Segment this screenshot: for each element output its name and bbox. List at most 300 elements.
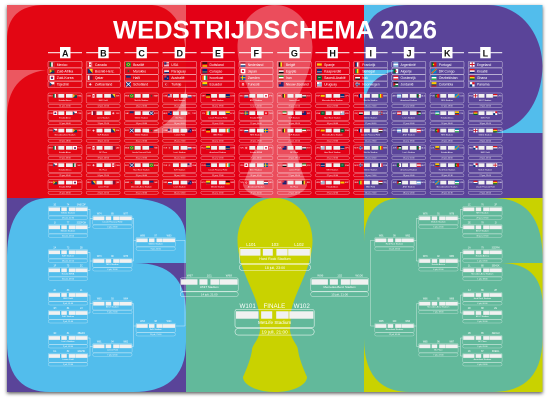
third place match: L102: [294, 242, 304, 247]
matches A: Estadio Akron: [59, 116, 71, 119]
matches I: Gillette Stadium: [364, 168, 378, 171]
right bracket: quarter-finals: 11 juli, 23:00: [389, 248, 401, 250]
panel: top left background shape: [7, 5, 186, 133]
third place match: Hard Rock Stadium: [259, 257, 291, 261]
left bracket: round of 32: 2A: [53, 246, 57, 249]
matches J: JOR: [393, 148, 397, 150]
matches L: 18 juni, 01:00: [480, 123, 491, 125]
matches J: ALG: [421, 146, 426, 150]
right bracket: round of 32: Estadio Azteca: [476, 254, 490, 257]
left bracket: round of 32: Lumen Field: [62, 359, 74, 361]
matches I: 26 juni, 21:00: [365, 192, 376, 194]
right bracket: round of 32: 1C: [468, 204, 471, 206]
right bracket: round of 16: [419, 213, 458, 356]
left bracket: round of 32: 3BEFIJ: [78, 333, 85, 335]
matches E: CIV: [231, 165, 235, 167]
matches G: Lumen Field: [289, 169, 299, 171]
left bracket: round of 32: 77: [67, 222, 70, 224]
right bracket: round of 16: W88: [449, 299, 455, 301]
matches B: SoFi Stadium: [98, 134, 109, 137]
right bracket: round of 32: 1A: [468, 246, 471, 249]
team list I: Noorwegen: [362, 83, 380, 87]
left bracket: round of 16: W77: [123, 213, 129, 215]
matches E: NRG Stadium: [212, 99, 224, 102]
matches I: FRA: [354, 94, 359, 98]
matches G: NZL: [278, 148, 282, 150]
heading B: B: [100, 48, 107, 58]
matches G: 15 juni, 21:00: [289, 106, 300, 108]
team list A: Zuid-Korea: [57, 76, 74, 80]
matches E: Lincoln Financial Field: [208, 117, 227, 119]
left bracket: quarter-finals: W94: [167, 321, 172, 323]
matches I: 16 juni, 21:00: [365, 106, 376, 108]
team list K: Colombia: [439, 83, 453, 87]
matches A: MEX: [77, 165, 82, 167]
matches E: 15 juni, 01:00: [212, 123, 223, 125]
team list B: Qatar: [95, 76, 104, 80]
left bracket: round of 32: 29 juni, 22:30: [62, 217, 75, 219]
matches H: 16 juni, 00:00: [327, 123, 338, 125]
left bracket: round of 32: 1E: [53, 204, 57, 206]
matches F: Estadio BBVA: [250, 116, 263, 119]
matches K: UZB: [460, 182, 464, 184]
matches G: 27 juni, 05:00: [289, 175, 300, 177]
matches E: [201, 93, 235, 194]
matches L: CRO: [498, 96, 502, 98]
left bracket: round of 32: Estadio BBVA: [62, 272, 75, 275]
team list E: Ecuador: [210, 83, 223, 87]
matches E: 25 juni, 22:00: [212, 175, 223, 177]
right semi-final: 102: [337, 273, 342, 277]
matches K: POR: [459, 165, 464, 167]
group J: [392, 47, 426, 194]
icon: trophy: [238, 198, 312, 392]
left bracket: round of 32: MetLife Stadium: [61, 229, 76, 232]
right bracket: round of 16: 96: [437, 341, 440, 343]
matches J: ALG: [393, 164, 397, 167]
team list G: Nieuw-Zeeland: [286, 83, 309, 87]
matches D: PAR: [192, 146, 197, 150]
matches K: 24 juni, 04:00: [441, 158, 453, 160]
matches A: CZE: [49, 130, 53, 132]
matches E: 21 juni, 02:00: [212, 158, 223, 160]
left bracket: round of 32: 3ABCDF: [77, 203, 86, 206]
matches I: MetLife Stadium: [364, 151, 378, 154]
team list H: Kaapverdië: [324, 69, 341, 73]
right semi-final: Mercedes-Benz Stadium: [324, 285, 356, 289]
left bracket: round of 16: 4 juli, 23:00: [107, 226, 118, 228]
team list C: Marokko: [133, 69, 146, 73]
left bracket: round of 16: W75: [123, 256, 129, 258]
matches H: ESP: [316, 130, 321, 132]
group F: [239, 47, 273, 194]
heading I: I: [370, 48, 372, 58]
matches F: NED: [240, 130, 244, 132]
panel: top right background shape: [364, 5, 542, 198]
matches J: AUT: [393, 112, 397, 115]
heading H: H: [329, 48, 336, 58]
matches F: 21 juni, 06:00: [250, 158, 262, 160]
matches K: COL: [460, 113, 463, 115]
matches G: SoFi Stadium: [289, 116, 300, 119]
third place match: 103: [271, 242, 279, 247]
matches K: [430, 93, 464, 194]
heading C: [124, 47, 158, 58]
right bracket: round of 32: AT&T Stadium: [476, 229, 489, 232]
left bracket: round of 32: 75: [67, 265, 70, 267]
third place match: [239, 242, 311, 270]
matches H: CPV: [345, 96, 350, 98]
team list I: [354, 61, 388, 88]
matches D: TUR: [163, 148, 168, 150]
matches E: BMO Field: [213, 135, 222, 137]
matches D: [163, 93, 197, 194]
matches D: 26 juni, 04:00: [174, 192, 185, 194]
matches G: EGY: [307, 148, 311, 150]
left bracket: round of 16: 89: [111, 213, 114, 215]
right bracket: quarter-finals: W95: [379, 321, 384, 323]
team list E: Curaçao: [210, 69, 222, 73]
matches B: BIH: [87, 182, 91, 184]
matches B: SUI: [87, 130, 91, 132]
matches A: KOR: [77, 182, 82, 184]
right bracket: round of 32: 87: [481, 351, 484, 353]
matches B: SUI: [87, 165, 91, 167]
matches C: Hard Rock Stadium: [133, 168, 150, 171]
matches D: TUR: [163, 165, 168, 167]
team list C: Brazilië: [133, 63, 144, 67]
matches K: Hard Rock Stadium: [439, 168, 456, 171]
matches F: JPN: [240, 165, 244, 167]
matches L: 27 juni, 23:00: [480, 192, 491, 194]
matches H: ESP: [316, 96, 321, 98]
matches L: BMO Field: [481, 117, 490, 119]
right bracket: round of 32: 3 juli, 05:00: [477, 346, 488, 348]
matches G: 21 juni, 21:00: [289, 140, 300, 142]
team list K: [430, 61, 464, 88]
decorative pale trophy: [238, 5, 312, 199]
left bracket: round of 32: 81: [67, 333, 70, 335]
matches D: PAR: [163, 181, 168, 184]
matches A: KOR: [49, 113, 53, 115]
matches A: CZE: [78, 113, 82, 115]
heading G: [277, 47, 311, 58]
matches I: NOR: [354, 148, 359, 150]
left semi-final: 14 juli, 21:00: [201, 292, 218, 296]
left bracket: round of 32: 1G: [53, 351, 57, 353]
matches J: AT&T Stadium: [403, 134, 415, 137]
matches G: BEL: [278, 96, 282, 98]
matches F: 26 juni, 01:00: [250, 192, 262, 194]
matches B: 12 juni, 21:00: [98, 106, 109, 108]
final match: FINALE: [264, 303, 285, 310]
matches G: IRN: [307, 165, 311, 167]
group I: [354, 47, 388, 194]
group H: [315, 47, 350, 194]
matches L: 24 juni, 01:00: [480, 158, 491, 160]
matches F: SWE: [268, 165, 273, 167]
matches B: QAT: [116, 181, 120, 184]
team list K: DR Congo: [439, 69, 455, 73]
matches C: [124, 93, 159, 194]
matches K: 23 juni, 19:00: [441, 140, 453, 142]
panel: right bracket background: [364, 198, 542, 392]
right bracket: round of 32: 4 juli, 00:00: [477, 303, 488, 305]
heading J: [392, 47, 426, 58]
matches D: USA: [163, 129, 168, 132]
right bracket: quarter-finals: 100: [392, 321, 397, 323]
right bracket: round of 32: 3EHIJK: [492, 265, 500, 267]
matches H: CPV: [316, 165, 321, 167]
right bracket: round of 16: 7 juli, 22:00: [433, 354, 444, 356]
matches J: 17 juni, 06:00: [403, 123, 414, 125]
matches K: UZB: [460, 130, 464, 132]
left bracket: round of 16: W74: [97, 213, 102, 215]
matches F: AT&T Stadium: [250, 168, 262, 171]
matches F: [239, 93, 273, 194]
left bracket: quarter-finals: W90: [167, 235, 172, 237]
matches J: ARG: [392, 94, 397, 98]
matches K: COL: [431, 148, 435, 150]
matches F: NED: [268, 182, 273, 184]
matches J: 23 juni, 05:00: [403, 158, 414, 160]
matches C: BRA: [154, 164, 159, 167]
group G: [277, 47, 311, 194]
matches C: HAI: [126, 112, 129, 115]
right bracket: round of 16: 91: [437, 213, 440, 215]
matches G: IRN: [278, 113, 282, 115]
left bracket: round of 32: 2K: [53, 290, 57, 292]
right bracket: round of 32: 76: [481, 204, 484, 206]
matches D: 20 juni, 06:00: [174, 158, 185, 160]
heading D: D: [177, 48, 184, 58]
matches G: SoFi Stadium: [289, 134, 300, 137]
left bracket: round of 32: 73: [67, 247, 70, 249]
team list G: België: [286, 63, 295, 67]
matches I: NOR: [354, 165, 359, 167]
team list G: Iran: [286, 76, 292, 80]
matches D: 19 juni, 21:00: [174, 140, 185, 142]
matches H: Estadio Akron: [327, 186, 338, 189]
matches B: CAN: [87, 146, 92, 150]
matches I: 23 juni, 02:00: [365, 158, 376, 160]
team list K: Oezbekistan: [439, 76, 458, 80]
matches D: Levi's Stadium: [173, 186, 186, 189]
heading J: J: [406, 48, 412, 58]
left semi-final: [180, 273, 238, 297]
matches J: [392, 93, 426, 194]
matches B: Lumen Field: [98, 187, 108, 189]
right bracket: round of 16: W85: [423, 341, 428, 343]
matches H: Mercedes-Benz Stadium: [322, 134, 343, 137]
matches A: RSA: [78, 94, 82, 98]
matches L: 23 juni, 22:00: [480, 140, 491, 142]
matches C: MAR: [154, 94, 159, 98]
matches K: 28 juni, 01:30: [441, 175, 453, 177]
matches D: AUS: [163, 112, 168, 115]
matches I: 22 juni, 23:00: [365, 140, 376, 142]
third place match: 18 juli, 23:00: [265, 266, 285, 270]
group D: [163, 47, 197, 194]
final match: W101: [240, 303, 256, 310]
matches C: Mercedes-Benz Stadium: [131, 186, 152, 189]
matches F: NRG Stadium: [250, 134, 262, 137]
matches J: ARG: [392, 129, 397, 132]
matches K: COD: [459, 148, 464, 150]
right bracket: round of 32: 3EFGIJ: [492, 333, 500, 335]
matches D: SoFi Stadium: [174, 168, 186, 171]
team list H: Uruguay: [324, 83, 337, 87]
matches K: 28 juni, 01:30: [441, 192, 453, 194]
matches L: MetLife Stadium: [478, 168, 492, 171]
matches F: 20 juni, 19:00: [250, 140, 262, 142]
matches L: PAN: [498, 112, 502, 115]
matches E: ECU: [202, 148, 206, 150]
right bracket: round of 32: 2I: [495, 222, 497, 224]
right bracket: round of 16: W87: [449, 341, 455, 343]
matches K: POR: [431, 130, 435, 132]
matches C: 14 juni, 03:00: [136, 123, 147, 125]
matches J: JOR: [393, 182, 397, 184]
right bracket: round of 32: Arrowhead Stadium: [474, 358, 492, 361]
matches H: URU: [316, 148, 321, 150]
heading L: [468, 47, 502, 58]
team list C: Schotland: [133, 83, 148, 87]
matches K: UZB: [431, 113, 435, 115]
matches C: SCO: [154, 113, 158, 115]
matches J: 28 juni, 04:00: [403, 192, 414, 194]
matches G: NZL: [278, 182, 282, 184]
right bracket: round of 32: 2H: [494, 290, 498, 292]
team list J: Oostenrijk: [400, 76, 416, 80]
heading F: F: [253, 48, 259, 58]
left semi-final: AT&T Stadium: [200, 285, 219, 289]
matches A: Mercedes-Benz Stadium: [55, 134, 76, 137]
left bracket: round of 32: 3 juli, 01:00: [63, 303, 74, 305]
right bracket: round of 16: 6 juli, 02:00: [433, 269, 444, 271]
panel: left bracket background: [7, 198, 186, 392]
left bracket: round of 32: 2C: [80, 265, 83, 267]
right bracket: round of 32: Hard Rock Stadium: [474, 297, 491, 300]
left semi-final: W98: [226, 273, 232, 277]
left bracket: round of 32: 1I: [54, 222, 56, 224]
matches C: 25 juni, 00:00: [136, 175, 147, 177]
left bracket: round of 16: Lumen Field: [107, 349, 118, 351]
team list I: Irak: [362, 76, 368, 80]
matches C: BRA: [125, 146, 130, 150]
matches F: TUN: [240, 182, 244, 184]
matches C: SCO: [125, 165, 130, 167]
right bracket: round of 32: 88: [481, 308, 484, 310]
heading D: [163, 47, 197, 58]
team list L: Engeland: [477, 63, 491, 67]
matches C: MAR: [125, 181, 130, 184]
matches A: RSA: [49, 181, 53, 184]
matches B: QAT: [116, 146, 120, 150]
matches L: GHA: [469, 112, 474, 115]
left bracket: round of 16: 7 juli, 02:00: [107, 354, 118, 356]
matches L: ENG: [469, 96, 473, 98]
matches F: TUN: [269, 113, 273, 115]
matches E: 25 juni, 22:00: [212, 192, 223, 194]
matches G: BEL: [278, 130, 282, 132]
right bracket: quarter-finals: 99: [393, 235, 396, 237]
left bracket: round of 16: W82: [123, 341, 129, 343]
right semi-final: W99: [317, 273, 324, 277]
left bracket: quarter-finals: 97: [154, 235, 158, 237]
matches E: GER: [230, 182, 235, 184]
matches G: IRN: [307, 130, 311, 132]
left bracket: quarter-finals: Gillette Stadium: [149, 242, 163, 245]
left bracket: round of 16: NRG Stadium: [106, 263, 119, 266]
matches F: 14 juni, 22:00: [250, 106, 262, 108]
matches A: MEX: [49, 148, 53, 150]
group L: [468, 47, 502, 194]
left bracket: round of 32: 3AEHIJ: [77, 350, 85, 353]
matches K: Estadio Akron: [441, 151, 453, 154]
matches E: Arrowhead Stadium: [209, 151, 227, 154]
matches D: SoFi Stadium: [174, 99, 186, 102]
matches H: CPV: [345, 148, 350, 150]
matches D: PAR: [192, 94, 197, 98]
matches L: ENG: [498, 165, 502, 167]
matches D: TUR: [192, 113, 197, 115]
matches K: 17 juni, 19:00: [441, 106, 453, 108]
matches A: 11 juni, 21:00: [59, 106, 71, 108]
group K: [430, 47, 464, 194]
right bracket: round of 32: 3CEFHI: [492, 247, 500, 249]
right bracket: round of 32: 29 juni, 19:00: [476, 217, 489, 219]
matches E: Lincoln Financial Field: [208, 169, 227, 171]
matches K: 18 juni, 04:00: [441, 123, 453, 125]
team list J: Algerije: [400, 69, 412, 73]
matches B: BC Place: [99, 169, 107, 171]
heading A: [48, 47, 82, 58]
matches A: 25 juni, 03:00: [59, 175, 71, 177]
right bracket: round of 32: 1L: [468, 265, 471, 267]
matches K: COL: [431, 165, 435, 167]
left bracket: quarter-finals: W93: [140, 321, 146, 323]
matches B: Levi's Stadium: [97, 116, 110, 119]
right bracket: round of 16: Mercedes-Benz Stadium: [427, 306, 450, 309]
matches F: JPN: [269, 96, 273, 98]
matches C: Lincoln Financial Field: [132, 152, 151, 154]
right bracket: quarter-finals: W91: [379, 235, 384, 237]
left semi-final: W97: [187, 273, 193, 277]
matches H: [315, 93, 350, 194]
left bracket: round of 32: 1F: [53, 265, 57, 267]
matches H: ESP: [345, 182, 350, 184]
right bracket: round of 16: 5 juli, 22:00: [433, 226, 444, 228]
matches F: Estadio BBVA: [250, 151, 263, 154]
matches J: Levi's Stadium: [403, 151, 415, 154]
team list A: Mexico: [57, 63, 68, 67]
left bracket: round of 16: AT&T Stadium: [106, 306, 119, 309]
matches B: 13 juni, 21:00: [98, 123, 109, 125]
matches G: Lumen Field: [289, 100, 299, 102]
matches A: RSA: [78, 129, 82, 132]
matches G: [277, 93, 311, 194]
left bracket: round of 32: 2J: [80, 308, 83, 310]
matches I: MetLife Stadium: [364, 99, 378, 102]
heading E: [201, 47, 235, 58]
team list A: [48, 61, 82, 88]
matches A: KOR: [77, 148, 82, 150]
right bracket: round of 32: 2D: [468, 308, 471, 310]
right bracket: round of 32: 1 juli, 18:00: [477, 278, 488, 280]
matches F: 26 juni, 01:00: [250, 175, 262, 177]
left bracket: round of 16: 93: [111, 299, 114, 301]
